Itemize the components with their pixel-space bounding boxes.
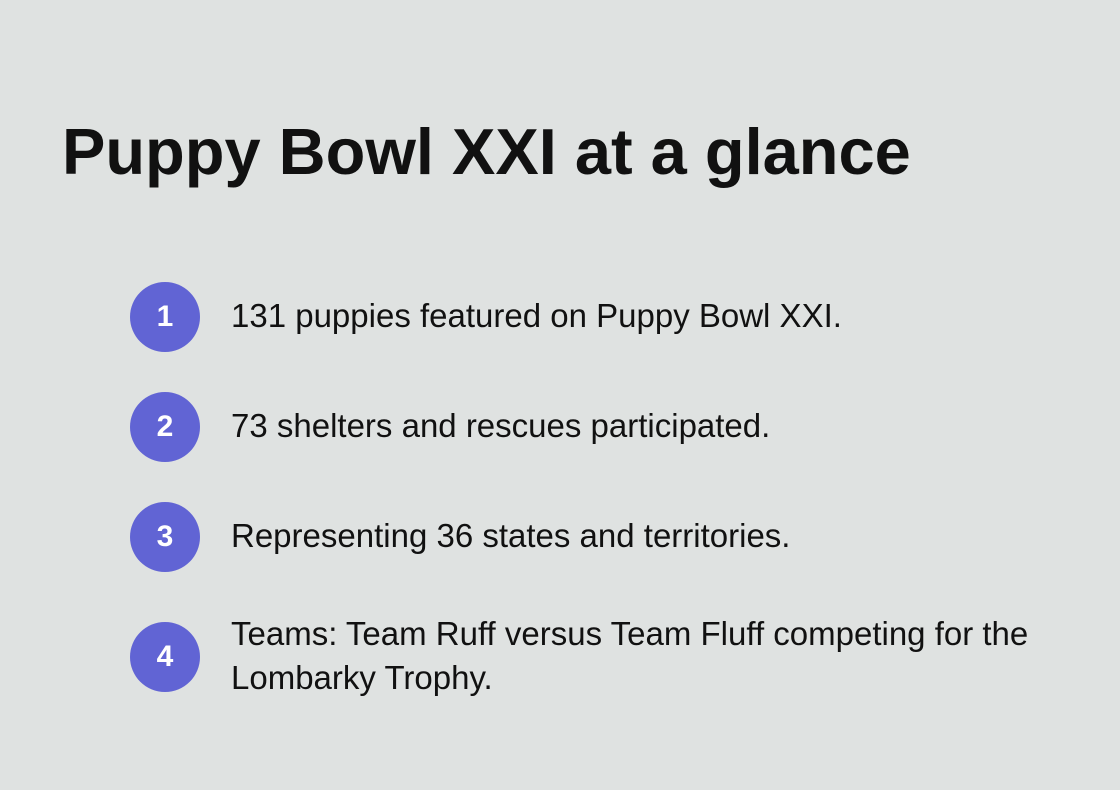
badge 2 bbox=[130, 392, 200, 462]
badge 4 bbox=[130, 622, 200, 692]
text 1: 131 puppies featured on Puppy Bowl XXI. bbox=[231, 297, 842, 334]
badge 1: 1 bbox=[157, 300, 173, 333]
text 4: Teams: Team Ruff versus Team Fluff competing for the Lombarky Trophy. bbox=[231, 615, 1028, 696]
badge 1 bbox=[130, 282, 200, 352]
item 1 bbox=[130, 282, 842, 352]
badge 2: 2 bbox=[157, 410, 173, 443]
item 3 bbox=[130, 502, 790, 572]
text 2: 73 shelters and rescues participated. bbox=[231, 407, 770, 444]
item 4 bbox=[130, 615, 1028, 696]
text 3: Representing 36 states and territories. bbox=[231, 517, 790, 554]
badge 4: 4 bbox=[157, 640, 173, 673]
item 2 bbox=[130, 392, 770, 462]
badge 3 bbox=[130, 502, 200, 572]
title: Puppy Bowl XXI at a glance bbox=[62, 115, 911, 188]
badge 3: 3 bbox=[157, 520, 173, 553]
